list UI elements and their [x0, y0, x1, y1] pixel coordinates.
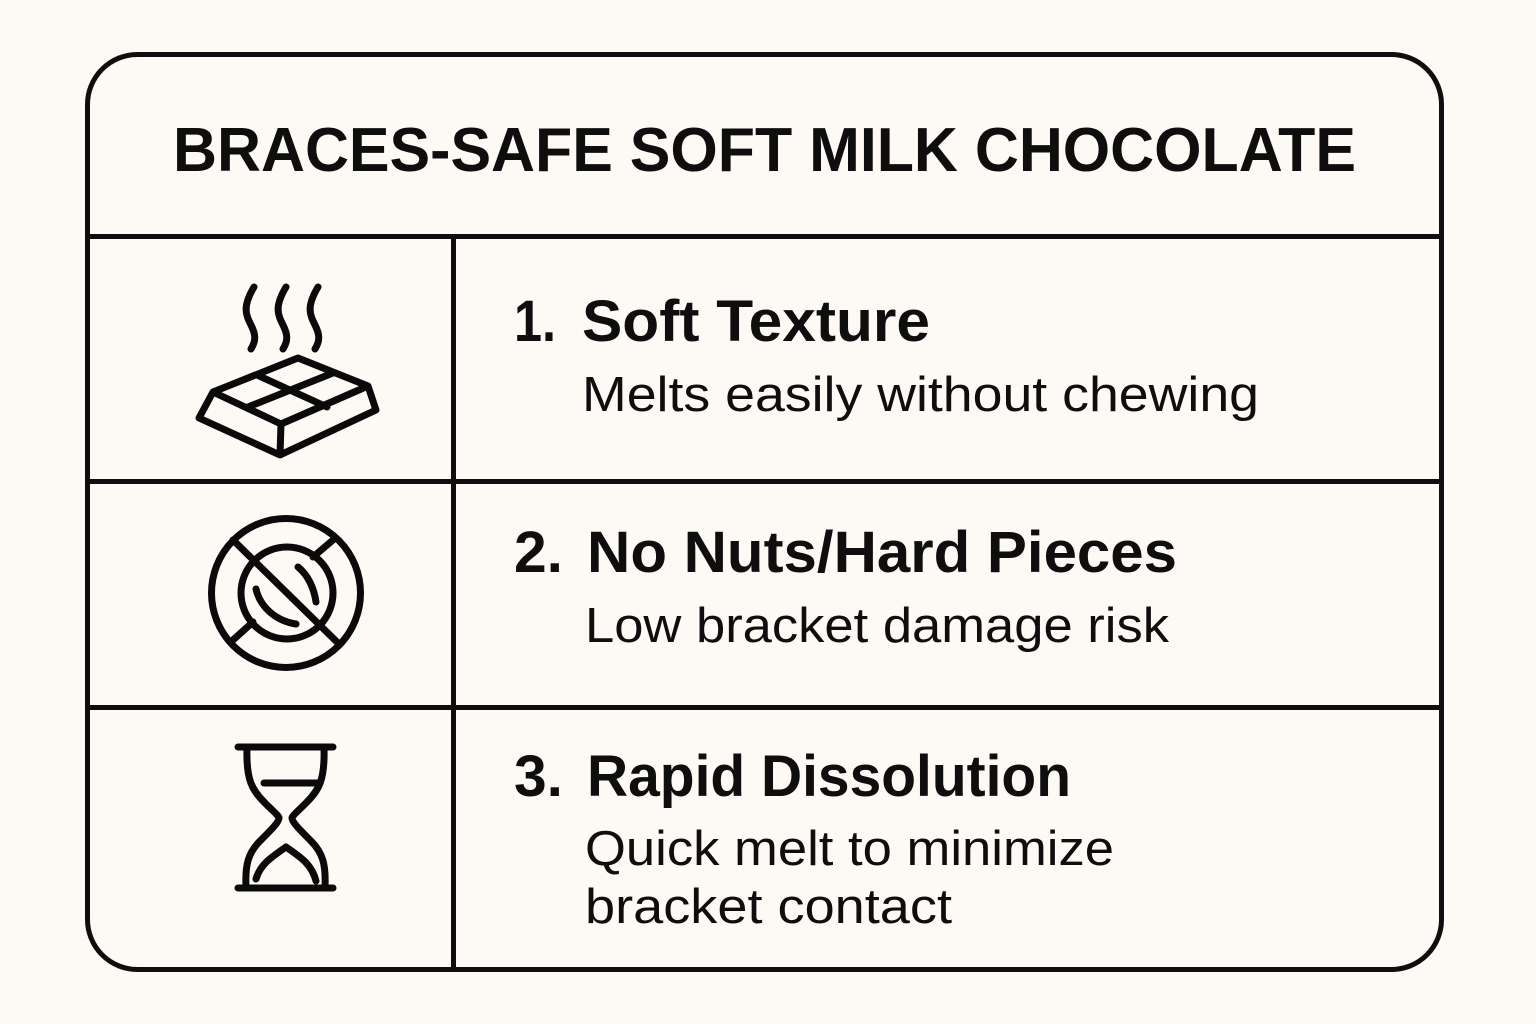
row 1 heading: Soft Texture: [582, 289, 930, 354]
row 1 number: 1.: [514, 289, 556, 354]
row 3 heading: Rapid Dissolution: [587, 744, 1071, 809]
row 3 description: Quick melt to minimize: [585, 822, 1114, 876]
icon: hourglass: [238, 747, 333, 888]
row 3 description: [585, 822, 1114, 934]
panel: table frame: [88, 54, 1442, 970]
title: BRACES-SAFE SOFT MILK CHOCOLATE: [173, 116, 1356, 185]
row 3 number: 3.: [514, 744, 563, 809]
row 2 heading: No Nuts/Hard Pieces: [587, 520, 1177, 585]
icon: no nuts: [212, 518, 360, 668]
row 2 number: 2.: [514, 520, 563, 585]
icon: melting chocolate bar: [199, 287, 376, 455]
row 1 description: Melts easily without chewing: [582, 368, 1259, 422]
row 2 description: Low bracket damage risk: [585, 599, 1170, 653]
row 3 description: bracket contact: [585, 880, 952, 934]
